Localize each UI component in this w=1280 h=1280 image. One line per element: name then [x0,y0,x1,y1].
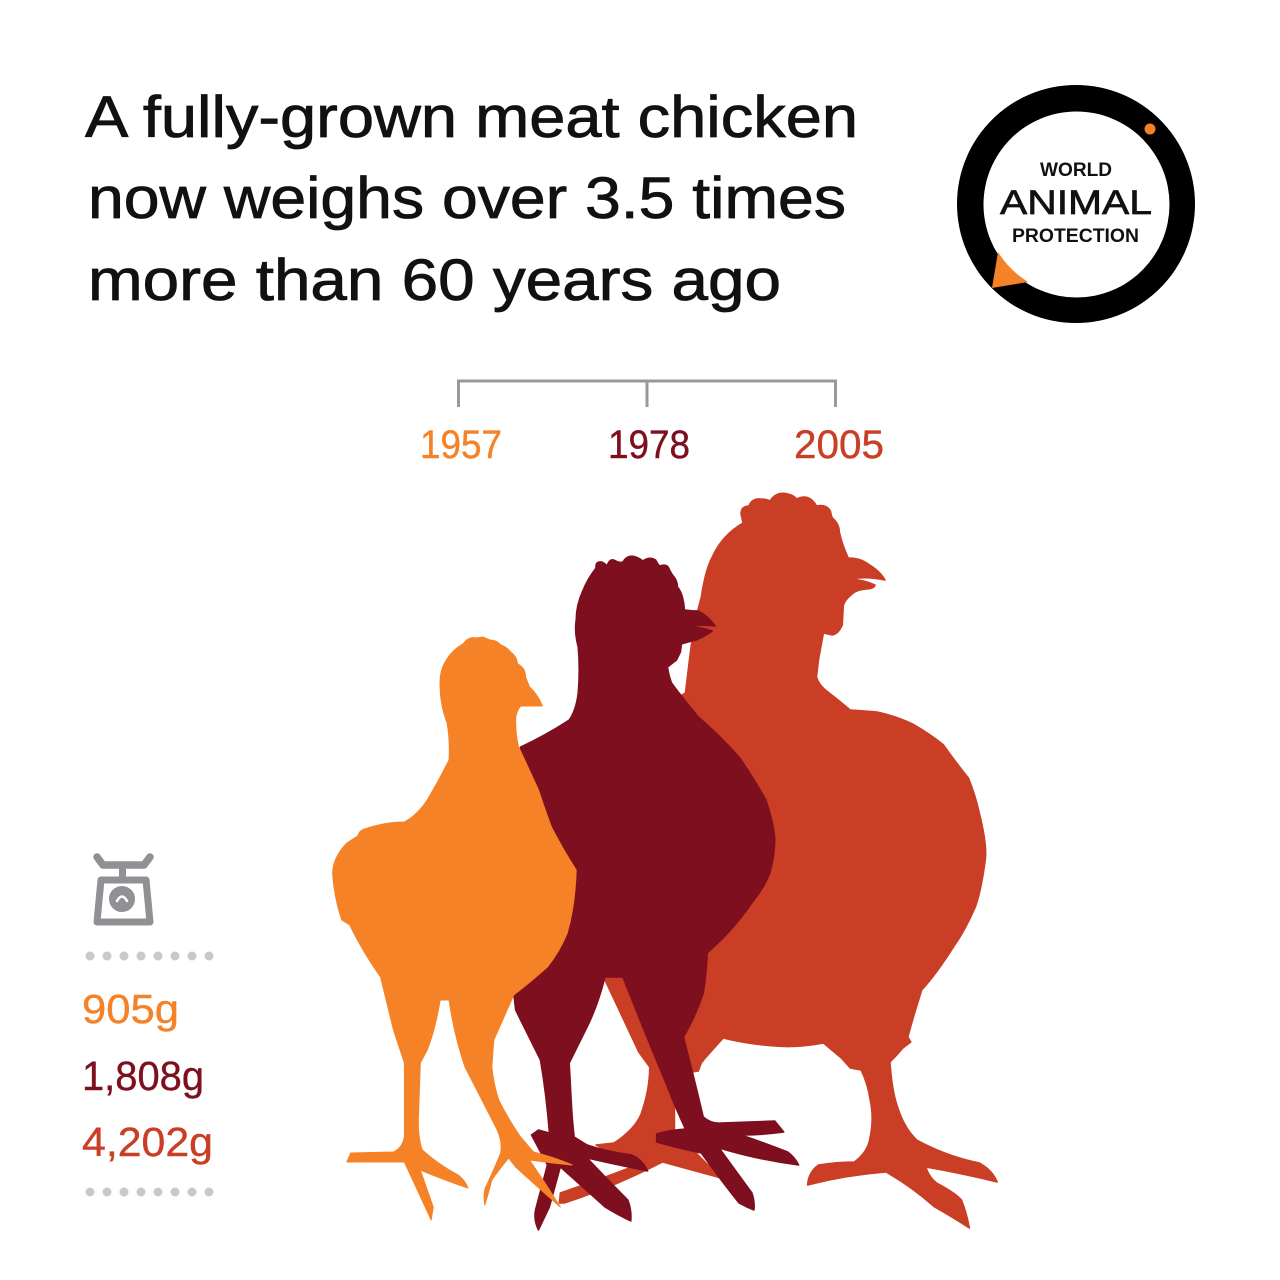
logo: World Animal Protection: WORLD [1040,159,1112,181]
logo: World Animal Protection: ANIMAL [1000,184,1152,222]
dotted divider: upper [86,952,214,960]
weight values: 4,202g [82,1119,213,1165]
title: A fully-grown meat chicken [85,85,858,150]
logo: World Animal Protection: PROTECTION [1012,226,1139,247]
year labels: 1978 [608,423,690,467]
timeline bracket [458,381,836,407]
title: now weighs over 3.5 times [88,166,846,231]
year labels: 2005 [794,423,884,467]
weight values: 905g [82,986,179,1032]
weight values: 1,808g [82,1053,204,1099]
icon: kitchen scale [97,857,150,922]
year labels [420,423,884,467]
logo: World Animal Protection [957,85,1195,323]
dotted divider: lower [86,1188,214,1196]
chicken silhouette: 2005 [559,493,997,1228]
chicken silhouette: 1978 [499,556,799,1230]
year labels: 1957 [420,423,502,467]
weight values [82,986,213,1165]
title: more than 60 years ago [88,248,781,313]
chicken silhouette: 1957 [333,637,576,1220]
title [85,85,858,313]
